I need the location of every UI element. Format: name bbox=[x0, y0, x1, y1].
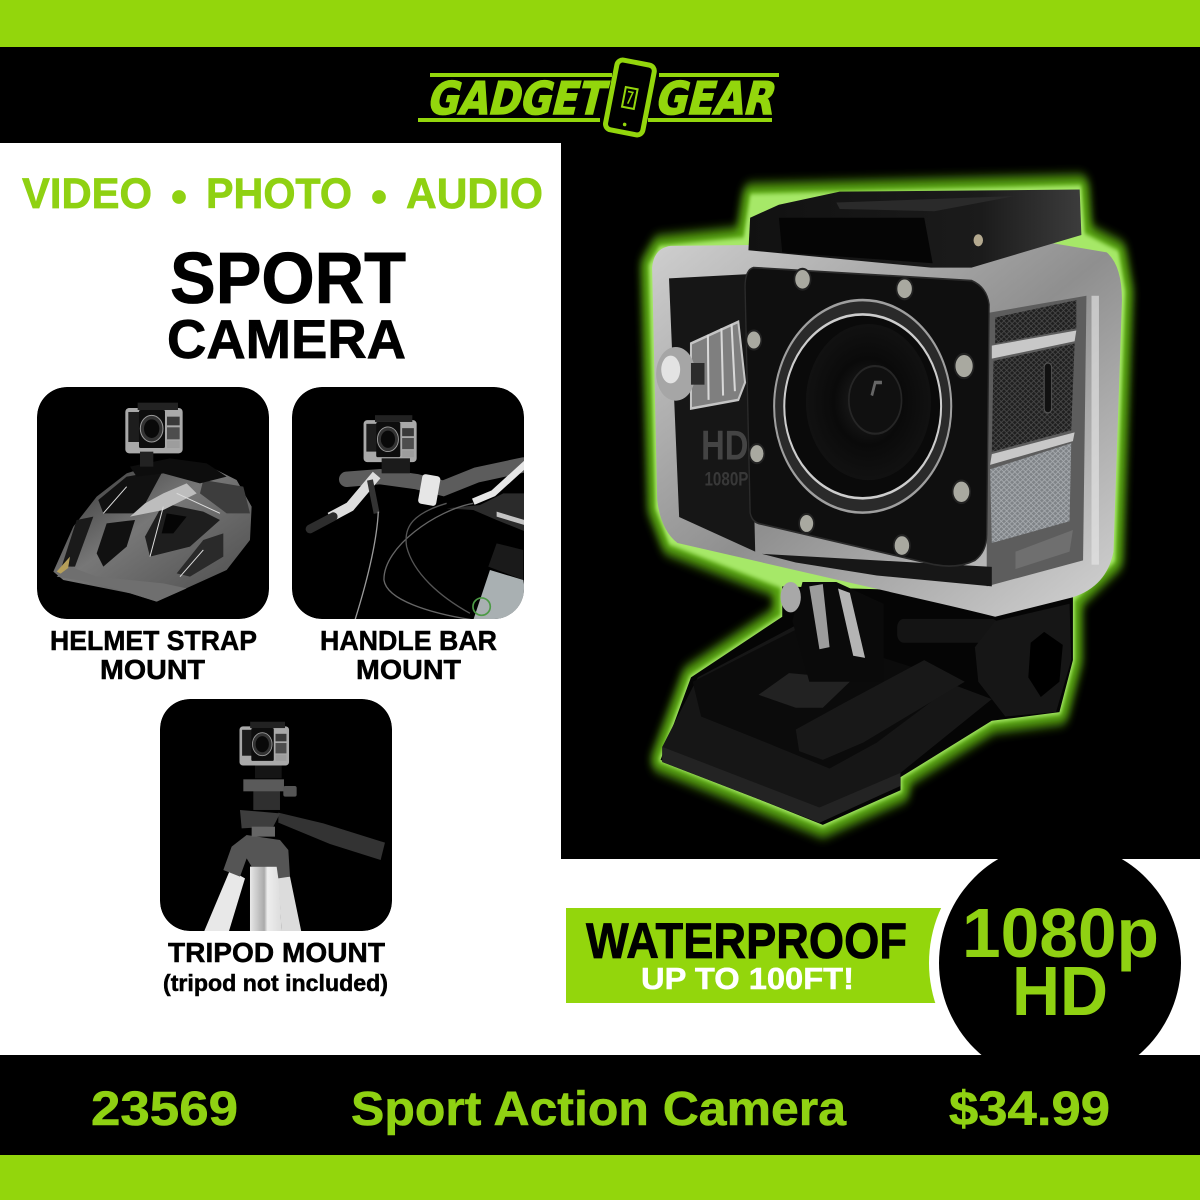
title: sport camera: CAMERA bbox=[167, 308, 406, 370]
heading: video photo audio bbox=[22, 170, 543, 218]
icon: bike handle bar with camera bbox=[310, 415, 530, 620]
camera base mount plate bbox=[662, 625, 992, 823]
heading: video photo audio: PHOTO bbox=[206, 170, 352, 218]
camera screws bbox=[746, 269, 974, 556]
label: handle bar mount: MOUNT bbox=[356, 654, 461, 685]
heading: video photo audio: AUDIO bbox=[406, 170, 543, 218]
label: tripod mount: TRIPOD MOUNT bbox=[168, 937, 385, 968]
camera side display panel: HD bbox=[701, 422, 748, 469]
badge: 1080p HD: 1080p bbox=[962, 894, 1159, 972]
footer: item number, name and price: $34.99 bbox=[949, 1083, 1110, 1136]
callout: waterproof banner bbox=[566, 908, 951, 1003]
panel: helmet strap mount bbox=[37, 387, 269, 619]
label: helmet strap mount: MOUNT bbox=[100, 654, 205, 685]
callout: waterproof banner: UP TO 100FT! bbox=[641, 961, 854, 996]
panel: handle bar mount bbox=[292, 387, 530, 620]
title: sport camera bbox=[167, 239, 406, 370]
camera side display panel: 1080P bbox=[704, 469, 748, 490]
icon: tripod with camera bbox=[203, 722, 385, 933]
badge: 1080p HD bbox=[929, 859, 1181, 1055]
camera dark interior behind mount bbox=[661, 586, 1073, 825]
camera top clip bbox=[748, 190, 1081, 268]
panel: tripod mount bbox=[160, 699, 392, 933]
camera shutter button bbox=[656, 322, 745, 409]
label: helmet strap mount bbox=[50, 625, 257, 685]
white feature panel bbox=[0, 143, 561, 1055]
heading: video photo audio: VIDEO bbox=[22, 170, 152, 218]
label: helmet strap mount: HELMET STRAP bbox=[50, 625, 257, 656]
callout: waterproof banner: WATERPROOF bbox=[586, 913, 907, 969]
label: handle bar mount bbox=[320, 625, 497, 685]
footer: item number, name and price: Sport Action Camera bbox=[351, 1083, 846, 1136]
main product photo: sport camera bbox=[650, 187, 1124, 825]
footer: item number, name and price: 23569 bbox=[91, 1083, 238, 1136]
camera clear waterproof housing bbox=[652, 242, 1122, 617]
camera housing lower edge bbox=[762, 554, 992, 586]
white lower-right panel bbox=[561, 859, 1200, 1055]
icon: helmet with camera bbox=[53, 403, 252, 602]
title: sport camera: SPORT bbox=[170, 239, 406, 319]
brand logo: Gadget Gear bbox=[418, 59, 782, 136]
camera right side panels bbox=[987, 296, 1099, 586]
camera side display panel bbox=[669, 274, 755, 552]
camera glow outline bbox=[650, 187, 1124, 825]
label: tripod mount bbox=[163, 937, 388, 996]
bottom green band bbox=[0, 1155, 1200, 1200]
camera mount arms and bolt bbox=[781, 582, 1071, 716]
badge: 1080p HD: HD bbox=[1012, 952, 1108, 1030]
camera front plate bbox=[745, 268, 989, 566]
brand logo: Gadget Gear: GEAR bbox=[651, 73, 782, 125]
brand logo: Gadget Gear: GADGET bbox=[423, 73, 612, 125]
label: tripod mount: (tripod not included) bbox=[163, 970, 388, 996]
footer: item number, name and price bbox=[91, 1083, 1110, 1136]
camera lens bbox=[774, 300, 951, 513]
top green band bbox=[0, 0, 1200, 47]
label: handle bar mount: HANDLE BAR bbox=[320, 625, 497, 656]
